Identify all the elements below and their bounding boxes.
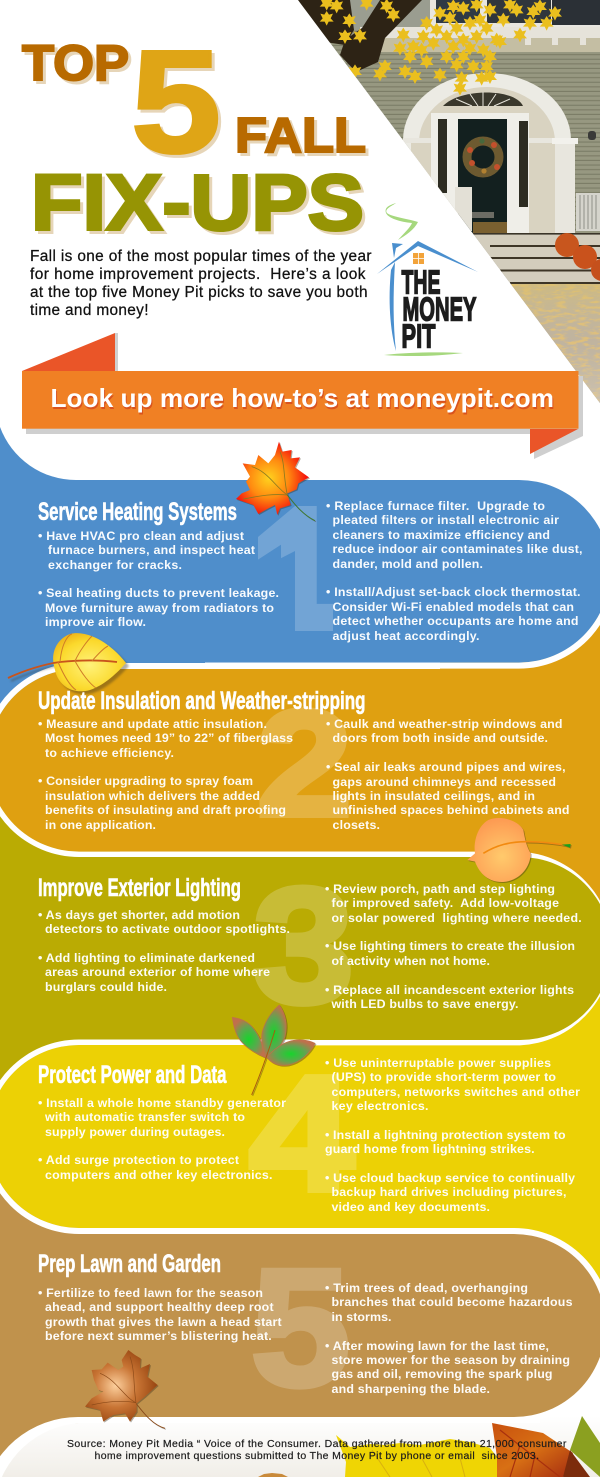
right list: Consider Wi-Fi enabled models that can	[332, 600, 574, 614]
right list: computers, networks switches and other	[332, 1085, 580, 1099]
leaf: red maple	[236, 442, 315, 521]
left list: ahead, and support healthy deep root	[45, 1300, 274, 1314]
tree trunk and branch	[298, 0, 422, 72]
panel 5 text: Prep Lawn and Garden	[38, 1250, 573, 1396]
panel: footer background	[0, 1325, 600, 1477]
right list: for improved safety. Add low-voltage	[332, 896, 559, 910]
left list	[38, 529, 279, 629]
right list: pleated filters or install electronic air	[332, 513, 559, 527]
banner: look up more how-tos	[22, 333, 583, 459]
left list: furnace burners, and inspect heat	[48, 543, 255, 557]
right list: cleaners to maximize efficiency and	[332, 528, 550, 542]
logo: The Money Pit: THE	[402, 264, 440, 300]
logo: The Money Pit: MONEY	[402, 290, 476, 328]
right list: backup hard drives including pictures,	[332, 1185, 566, 1199]
left list: • Add surge protection to protect	[38, 1153, 239, 1167]
title	[22, 20, 366, 246]
house photo	[298, 0, 600, 410]
heading: Update Insulation and Weather-stripping: Update Insulation and Weather-stripping	[38, 687, 366, 715]
logo: The Money Pit: PIT	[402, 318, 436, 354]
right list	[325, 882, 582, 1011]
title: 5	[131, 20, 221, 183]
right list: • Trim trees of dead, overhanging	[325, 1281, 528, 1295]
numeral 2: 2	[257, 679, 352, 847]
numeral 5: 5	[251, 1236, 350, 1421]
panel 3 text: Improve Exterior Lighting	[38, 874, 582, 1011]
intro paragraph: at the top five Money Pit picks to save you both	[30, 284, 368, 301]
leaf: yellow birch	[8, 633, 126, 691]
right list: and sharpening the blade.	[332, 1382, 490, 1396]
panel 2 text: Update Insulation	[38, 687, 570, 832]
logo: The Money Pit	[377, 203, 478, 356]
left list: detectors to activate outdoor spotlights.	[45, 922, 290, 936]
intro paragraph: Fall is one of the most popular times of the year	[30, 248, 372, 265]
left list: burglars could hide.	[45, 980, 167, 994]
left list: • Add lighting to eliminate darkened	[38, 951, 255, 965]
left list: • Measure and update attic insulation.	[38, 717, 267, 731]
left list: supply power during outages.	[45, 1125, 225, 1139]
right list: detect whether occupants are home and	[332, 614, 578, 628]
heading: Prep Lawn and Garden: Prep Lawn and Garden	[38, 1250, 221, 1278]
panel 1 text: Service Heating Systems	[38, 498, 582, 643]
right list	[326, 717, 570, 832]
left list: benefits of insulating and draft proofing	[45, 803, 286, 817]
left list: improve air flow.	[45, 615, 146, 629]
panel: step 5 background	[0, 1228, 600, 1423]
right list: closets.	[332, 818, 380, 832]
heading: Service Heating Systems: Service Heating Systems	[38, 498, 237, 526]
numeral 1: 1	[250, 476, 340, 664]
right list: adjust heat accordingly.	[332, 629, 480, 643]
left list: to achieve efficiency.	[45, 746, 174, 760]
left list: in one application.	[45, 818, 156, 832]
left list: • Install a whole home standby generator	[38, 1096, 286, 1110]
title: TOP	[22, 35, 129, 91]
banner: look up more how-tos: Look up more how-to’s at moneypit.com	[50, 383, 554, 413]
right list: dander, mold and pollen.	[332, 557, 483, 571]
left list: insulation which delivers the added	[45, 789, 260, 803]
right list: unfinished spaces behind cabinets and	[332, 803, 570, 817]
panel: step 2 background	[0, 669, 470, 852]
right list: • Seal air leaks around pipes and wires,	[326, 760, 566, 774]
left list: • Fertilize to feed lawn for the season	[38, 1286, 263, 1300]
left list: with automatic transfer switch to	[44, 1110, 245, 1124]
right list: • Replace all incandescent exterior lights	[325, 983, 574, 997]
left list: • Seal heating ducts to prevent leakage.	[38, 586, 279, 600]
right list	[325, 1056, 580, 1214]
panel: step 4 background	[0, 1045, 470, 1228]
left list: computers and other key electronics.	[45, 1168, 272, 1182]
heading: Improve Exterior Lighting: Improve Exterior Lighting	[38, 874, 241, 902]
left list	[38, 1096, 286, 1182]
left list: • As days get shorter, add motion	[38, 908, 240, 922]
right list: • Install a lightning protection system to	[325, 1128, 566, 1142]
source note: home improvement questions submitted to The Money Pit by phone or email since 2003.	[94, 1450, 539, 1462]
left list: Move furniture away from radiators to	[45, 601, 274, 615]
left list: • Consider upgrading to spray foam	[38, 774, 253, 788]
title: FALL	[235, 109, 366, 163]
left list: before next summer’s blistering heat.	[45, 1329, 272, 1343]
right list: • Caulk and weather-strip windows and	[326, 717, 562, 731]
left list: areas around exterior of home where	[45, 965, 270, 979]
right list: • Use cloud backup service to continually	[325, 1171, 575, 1185]
panel: step 1 background	[0, 480, 600, 669]
right list	[325, 1281, 573, 1396]
right list: gaps around chimneys and recessed	[332, 775, 556, 789]
left list: growth that gives the lawn a head start	[45, 1315, 282, 1329]
right list: with LED bulbs to save energy.	[330, 997, 518, 1011]
left list	[38, 717, 293, 832]
leaf: brown maple	[85, 1350, 165, 1428]
right list: gas and oil, removing the spark plug	[332, 1367, 552, 1381]
right list: of activity when not home.	[332, 954, 490, 968]
right list	[326, 499, 582, 643]
right list: or solar powered lighting where needed.	[332, 911, 582, 925]
intro paragraph: for home improvement projects. Here’s a look	[30, 266, 366, 283]
source note: Source: Money Pit Media “ Voice of the Consumer. Data gathered from more than 21,000 consumer	[67, 1438, 567, 1450]
left list	[38, 1286, 282, 1343]
leaf litter on ground	[510, 284, 600, 403]
source note	[67, 1438, 567, 1462]
footer leaves	[258, 1416, 600, 1477]
panel 4 text: Protect Power and Data	[38, 1056, 580, 1214]
title: FIX-UPS	[31, 158, 364, 246]
numeral 4: 4	[249, 1042, 354, 1225]
icon: front steps and pumpkins	[472, 233, 600, 284]
numeral 3: 3	[253, 854, 354, 1037]
right list: • After mowing lawn for the last time,	[325, 1339, 549, 1353]
left list	[38, 908, 290, 994]
top white panel curve	[0, 300, 300, 480]
yellow foliage	[320, 0, 562, 96]
right list: reduce indoor air contaminates like dust,	[332, 542, 582, 556]
right list: guard home from lightning strikes.	[325, 1142, 535, 1156]
right list: • Use uninterruptable power supplies	[325, 1056, 551, 1070]
heading: Protect Power and Data: Protect Power and Data	[38, 1061, 227, 1089]
left list: exchanger for cracks.	[48, 558, 182, 572]
right list: (UPS) to provide short-term power to	[332, 1070, 556, 1084]
right list: in storms.	[332, 1310, 392, 1324]
right list: key electronics.	[332, 1099, 428, 1113]
right list: • Install/Adjust set-back clock thermostat.	[326, 585, 580, 599]
right list: • Review porch, path and step lighting	[325, 882, 555, 896]
icon: porch arch	[403, 73, 600, 235]
intro paragraph: time and money!	[30, 302, 148, 319]
right list: doors from both inside and outside.	[332, 731, 548, 745]
right list: store mower for the season by draining	[332, 1353, 570, 1367]
leaf: peach	[467, 818, 571, 882]
left list: • Have HVAC pro clean and adjust	[38, 529, 244, 543]
intro paragraph	[30, 248, 372, 319]
panel: step 3 background	[0, 852, 600, 1045]
left and right band colour columns	[0, 420, 600, 1477]
right list: branches that could become hazardous	[332, 1295, 573, 1309]
right list: • Replace furnace filter. Upgrade to	[326, 499, 545, 513]
left edge curves	[0, 663, 310, 1477]
right list: video and key documents.	[332, 1200, 490, 1214]
leaf: green three-lobed	[232, 1005, 315, 1095]
left list: Most homes need 19” to 22” of fiberglass	[45, 731, 293, 745]
right list: • Use lighting timers to create the illusion	[325, 939, 575, 953]
right list: lights in insulated ceilings, and in	[332, 789, 535, 803]
